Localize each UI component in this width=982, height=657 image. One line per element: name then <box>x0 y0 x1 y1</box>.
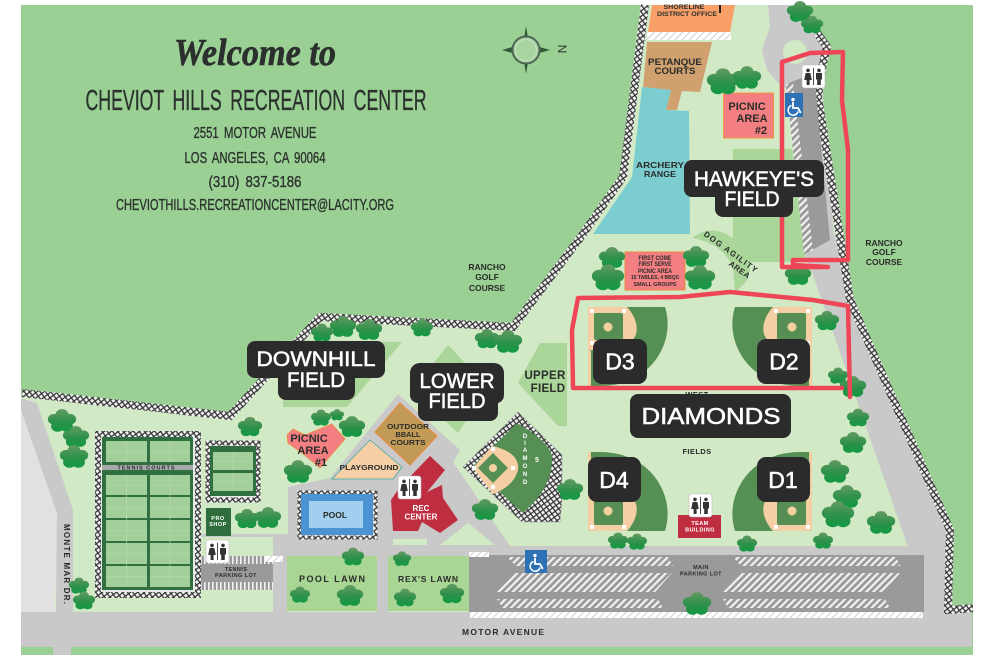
petanque courts: COURTS <box>654 66 696 76</box>
label: D2: D2 <box>769 348 799 374</box>
address text: (310) 837-5186 <box>208 174 302 191</box>
dog agility label: AREA <box>727 259 752 281</box>
softball diamond 4 <box>588 452 668 531</box>
diamond 5: N <box>523 472 527 478</box>
tennis parking lot: PARKING LOT <box>215 573 257 579</box>
picnic area 1: AREA <box>297 445 329 457</box>
rec center: CENTER <box>405 512 438 522</box>
icon: restroom rec center <box>398 476 421 499</box>
pool lawn <box>287 556 377 611</box>
petanque courts <box>643 42 712 110</box>
icon: accessible parking main <box>525 550 547 573</box>
downhill field <box>283 340 402 407</box>
title block <box>86 32 426 214</box>
picnic area 2 <box>724 93 774 138</box>
label: lower field <box>410 363 504 421</box>
rancho golf course label right: RANCHO <box>865 238 903 248</box>
rex's lawn: REX'S LAWN <box>398 574 458 584</box>
label: diamonds <box>630 394 791 438</box>
rancho golf course label right: COURSE <box>866 257 903 267</box>
rancho golf course label left: COURSE <box>469 283 506 293</box>
rancho golf course label left: RANCHO <box>468 262 506 272</box>
diamond 5: D <box>523 434 528 440</box>
west fields label <box>682 390 712 456</box>
first come first serve picnic area: 15 TABLES, 4 BBQS <box>631 275 680 281</box>
red outline: diamonds D2 D3 <box>572 292 850 397</box>
label: hawkeye's field: HAWKEYE'S <box>694 168 814 191</box>
archery range <box>593 87 690 234</box>
rancho golf course label left: GOLF <box>475 272 499 282</box>
main parking lot: MAIN <box>693 565 709 571</box>
title: center name: CHEVIOT HILLS RECREATION CENTER <box>86 85 426 117</box>
address text <box>116 125 394 214</box>
motor avenue label: MOTOR AVENUE <box>462 627 544 637</box>
diamond 5: 5 <box>535 457 539 464</box>
hawkeye's field <box>733 149 806 262</box>
icon: compass <box>502 26 569 74</box>
rancho golf course label right: GOLF <box>872 247 896 257</box>
team building: TEAM <box>691 521 709 527</box>
first come first serve picnic area <box>625 252 685 290</box>
diamond 5: A <box>523 448 528 454</box>
label: downhill field: FIELD <box>287 369 345 392</box>
address text: LOS ANGELES, CA 90064 <box>184 150 326 167</box>
label: D2 <box>757 339 810 384</box>
upper field label <box>524 370 566 395</box>
upper field label: FIELD <box>531 383 565 395</box>
picnic area 1 <box>287 424 345 469</box>
pool lawn: POOL LAWN <box>299 574 365 584</box>
label: hawkeye's field: FIELD <box>724 188 780 211</box>
label: D3: D3 <box>605 348 635 374</box>
softball diamond 1 <box>732 452 812 531</box>
lower field <box>412 345 488 433</box>
first come first serve picnic area: SMALL GROUPS <box>634 282 677 288</box>
pool <box>300 492 376 538</box>
label: D3 <box>593 339 647 384</box>
icon: compass: N <box>555 45 569 53</box>
rec center: REC <box>413 504 430 513</box>
team building <box>678 494 721 538</box>
upper field <box>518 343 567 426</box>
outdoor basketball courts <box>375 403 437 465</box>
rancho golf course label left <box>468 262 506 293</box>
icon: accessible parking upper <box>785 93 803 117</box>
tennis parking lot <box>201 556 283 590</box>
dog agility area <box>692 230 750 292</box>
label: lower field: LOWER <box>420 370 494 393</box>
archery range: ARCHERY <box>636 160 684 170</box>
label: D4: D4 <box>599 467 629 493</box>
first come first serve picnic area: FIRST SERVE <box>638 262 672 268</box>
address text: 2551 MOTOR AVENUE <box>194 125 316 142</box>
diamond 5: M <box>522 456 528 462</box>
rancho golf course label right <box>865 238 903 267</box>
monte mar dr label: MONTE MAR DR. <box>62 524 71 604</box>
diamond 5: I <box>524 441 526 447</box>
shoreline district office: DISTRICT OFFICE <box>657 11 718 18</box>
dog agility label: DOG AGILITY <box>702 230 760 275</box>
diamond 5: D <box>523 480 528 486</box>
main parking lot: PARKING LOT <box>680 572 722 578</box>
title: welcome to: Welcome to <box>174 32 336 74</box>
address text: CHEVIOTHILLS.RECREATIONCENTER@LACITY.ORG <box>116 197 394 214</box>
playground <box>332 440 402 479</box>
small tennis courts <box>208 443 258 500</box>
upper field label: UPPER <box>524 370 566 382</box>
picnic area 2: PICNIC <box>728 101 766 113</box>
pro shop: PRO <box>211 516 225 522</box>
outdoor basketball courts: OUTDOOR <box>387 422 430 431</box>
tennis parking lot: TENNIS <box>225 567 247 573</box>
rec center <box>391 456 458 533</box>
softball diamond 3 <box>588 307 668 386</box>
playground: PLAYGROUND <box>340 463 399 472</box>
outdoor basketball courts: BBALL <box>396 430 421 439</box>
red outline: parking area <box>782 52 848 267</box>
label: D1: D1 <box>768 467 798 493</box>
lawn patch below rec center <box>440 523 495 545</box>
label: hawkeye's field <box>684 160 824 217</box>
picnic area 1: PICNIC <box>290 433 328 445</box>
label: D1 <box>757 457 810 502</box>
softball diamond 2 <box>732 307 812 386</box>
shoreline district office <box>647 4 735 40</box>
tennis courts: TENNIS COURTS <box>118 466 175 472</box>
picnic area 2: #2 <box>755 125 767 137</box>
label: downhill field <box>247 341 385 400</box>
west fields label: WEST <box>685 390 709 399</box>
outdoor basketball courts: COURTS <box>390 438 426 447</box>
pro shop <box>206 508 231 536</box>
label: downhill field: DOWNHILL <box>256 348 376 371</box>
team building: BUILDING <box>685 528 715 534</box>
archery range: RANGE <box>644 169 676 179</box>
diamond 5: O <box>523 464 528 470</box>
tennis courts <box>98 434 198 595</box>
petanque courts: PETANQUE <box>648 57 702 67</box>
pro shop: SHOP <box>209 522 227 528</box>
main parking lot <box>469 552 924 618</box>
icon: restroom upper <box>802 65 825 88</box>
pool: POOL <box>323 510 347 520</box>
upper parking lot <box>786 74 830 254</box>
first come first serve picnic area: PICNIC AREA <box>638 269 673 275</box>
shoreline district office: SHORELINE <box>664 4 705 11</box>
icon: restroom tennis <box>206 540 229 563</box>
picnic area 1: #1 <box>315 457 327 469</box>
picnic area 2: AREA <box>736 113 768 125</box>
west fields label: FIELDS <box>682 447 712 456</box>
rex's lawn <box>388 556 470 611</box>
label: D4 <box>588 457 641 502</box>
label: lower field: FIELD <box>428 390 486 413</box>
diamond 5 <box>463 412 562 522</box>
label: diamonds: DIAMONDS <box>642 403 780 429</box>
first come first serve picnic area: FIRST COME <box>638 256 672 262</box>
